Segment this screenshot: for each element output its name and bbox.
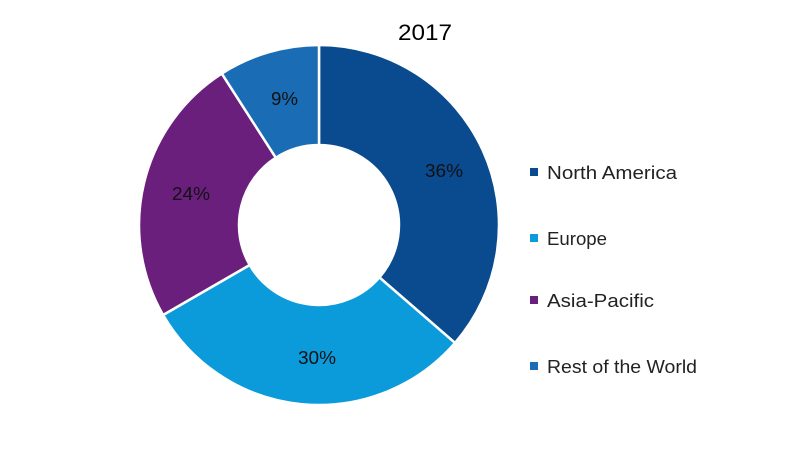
segment: Asia-Pacific (139, 74, 276, 315)
segment: Rest of the World (222, 45, 319, 158)
legend: Europe: Europe (547, 229, 607, 249)
legend: North America: North America (547, 163, 678, 183)
segment: North America (319, 45, 499, 343)
data labels (172, 89, 463, 368)
data labels: 9% (271, 89, 298, 109)
legend: Rest of the World: Rest of the World (547, 357, 697, 377)
title: 2017 (398, 20, 452, 45)
donut chart (139, 45, 499, 405)
legend: Asia-Pacific: Asia-Pacific (547, 291, 654, 311)
data labels: 24% (172, 184, 210, 204)
segment: Europe (163, 265, 455, 405)
data labels: 30% (298, 348, 336, 368)
legend (530, 163, 697, 377)
data labels: 36% (425, 161, 463, 181)
